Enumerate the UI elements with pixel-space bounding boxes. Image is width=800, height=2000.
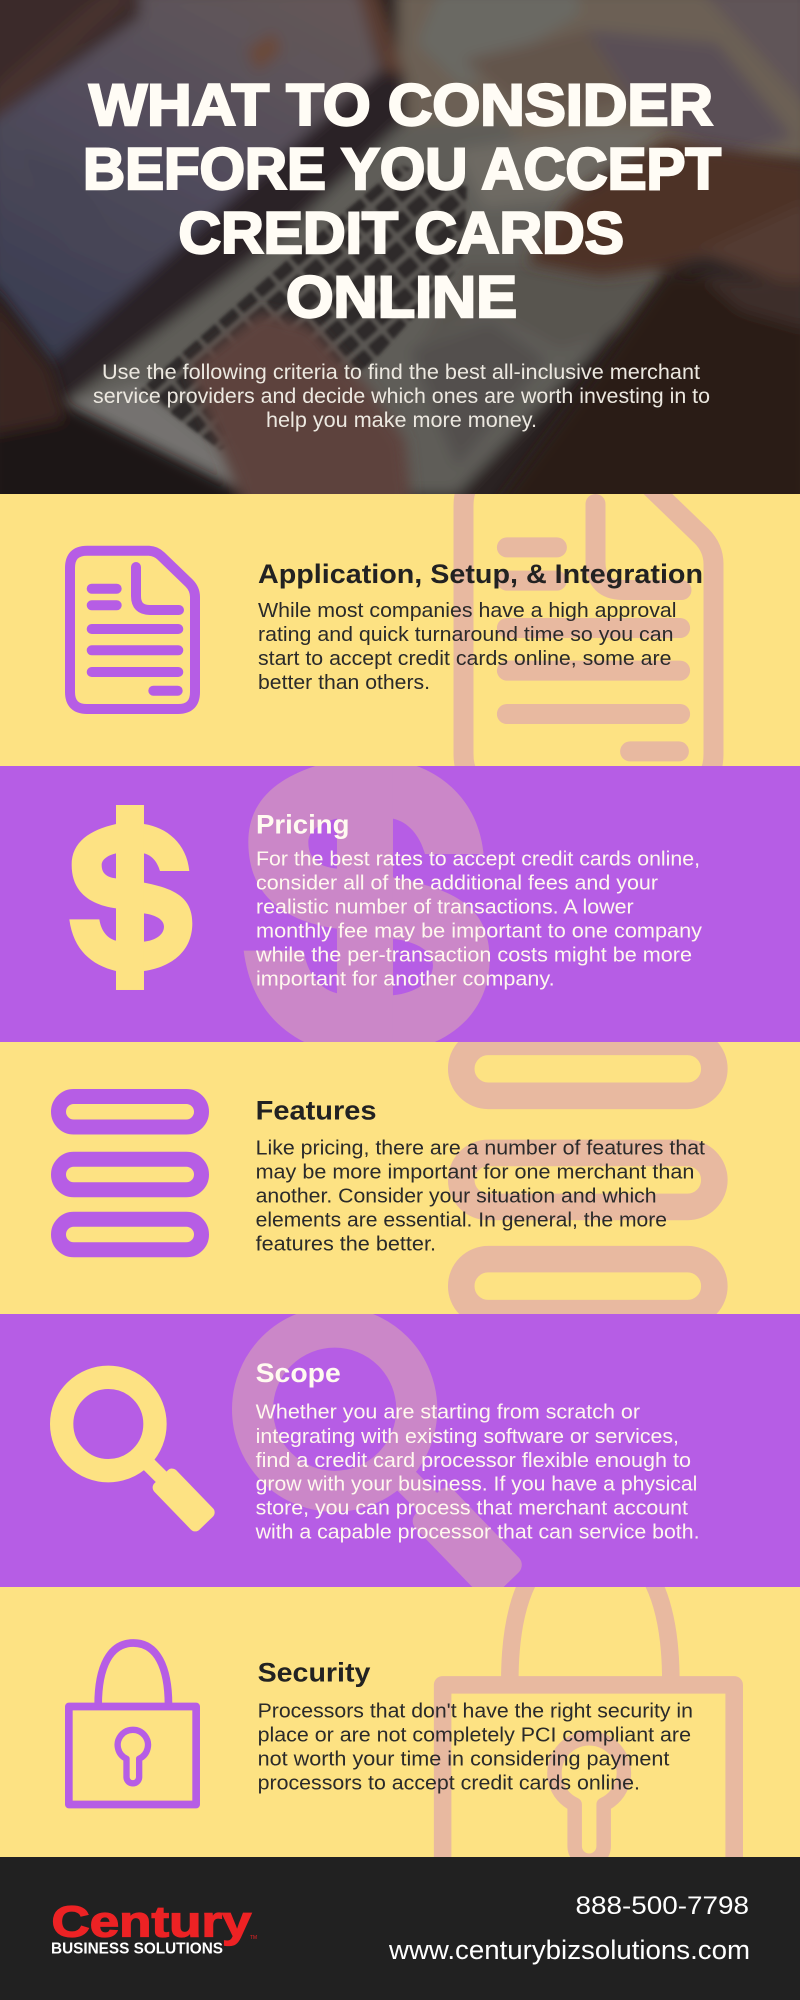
body text: processors to accept credit cards online.	[258, 1771, 640, 1794]
watermark: server bars	[461, 1042, 714, 1313]
panel: security	[65, 1587, 743, 1857]
heading: pricing: Pricing	[256, 810, 350, 840]
body text: rating and quick turnaround time so you can	[258, 623, 674, 646]
title: WHAT TO CONSIDER	[89, 73, 713, 138]
body text: with a capable processor that can service both.	[255, 1521, 700, 1544]
title: ONLINE	[286, 265, 517, 330]
photo: background, screen and laptop deck	[0, 0, 800, 520]
body text	[255, 1401, 700, 1544]
subtitle	[93, 361, 710, 432]
body text	[256, 1136, 705, 1255]
logo: Century Business Solutions: BUSINESS SOLUTIONS	[51, 1940, 223, 1957]
panel: application, setup and integration	[65, 494, 724, 766]
watermark: document icon	[464, 471, 714, 788]
body text: consider all of the additional fees and your	[256, 872, 658, 895]
subtitle: help you make more money.	[266, 409, 537, 432]
logo: Century Business Solutions: TM	[250, 1935, 257, 1941]
title: BEFORE YOU ACCEPT	[83, 137, 721, 202]
body text: better than others.	[258, 671, 430, 694]
logo: Century Business Solutions	[51, 1898, 257, 1957]
body text	[258, 1699, 693, 1794]
footer	[0, 1857, 800, 2000]
panel: scope	[0, 1314, 800, 1603]
panel: pricing	[0, 766, 800, 1042]
phone number: 888-500-7798	[576, 1892, 749, 1920]
heading: security: Security	[258, 1658, 370, 1688]
icon: server bars	[58, 1096, 202, 1250]
watermark: dollar sign	[244, 766, 490, 1042]
body text: integrating with existing software or services,	[256, 1425, 679, 1448]
icon: dollar sign	[69, 805, 192, 990]
subtitle: Use the following criteria to find the best all-inclusive merchant	[102, 361, 700, 384]
body text: may be more important for one merchant than	[256, 1160, 694, 1183]
body text: Like pricing, there are a number of features that	[256, 1136, 705, 1159]
body text: Processors that don't have the right security in	[258, 1699, 693, 1722]
body text: While most companies have a high approval	[258, 599, 676, 622]
icon: document	[70, 551, 195, 709]
icon: padlock	[69, 1643, 196, 1804]
watermark: padlock	[434, 1587, 743, 1857]
panel: features	[51, 1042, 728, 1314]
photo: hands and wooden table	[0, 140, 800, 510]
watermark: magnifying glass	[253, 1327, 526, 1603]
body text: store, you can process that merchant account	[256, 1497, 688, 1520]
title: CREDIT CARDS	[178, 201, 624, 266]
subtitle: service providers and decide which ones are worth investing in to	[93, 385, 710, 408]
website: www.centurybizsolutions.com	[388, 1935, 750, 1965]
heading: application, setup and integration: Application, Setup, & Integration	[258, 559, 703, 589]
heading: scope: Scope	[256, 1358, 341, 1388]
body text: start to accept credit cards online, some are	[258, 647, 672, 670]
body text: while the per-transaction costs might be more	[255, 943, 692, 966]
body text: another. Consider your situation and which	[256, 1184, 657, 1208]
body text: Whether you are starting from scratch or	[256, 1401, 640, 1424]
icon: magnifying glass	[62, 1377, 217, 1534]
body text: elements are essential. In general, the more	[256, 1208, 667, 1231]
body text	[255, 848, 703, 990]
body text	[258, 599, 676, 694]
body text: features the better.	[256, 1232, 436, 1255]
body text: realistic number of transactions. A lower	[256, 896, 634, 919]
body text: important for another company.	[256, 967, 555, 990]
body text: grow with your business. If you have a physical	[256, 1473, 697, 1496]
body text: place or are not completely PCI compliant are	[258, 1723, 691, 1746]
body text: find a credit card processor flexible enough to	[256, 1449, 691, 1472]
body text: not worth your time in considering payment	[258, 1747, 670, 1770]
logo: Century Business Solutions: Century	[52, 1898, 252, 1947]
heading: features: Features	[256, 1095, 377, 1125]
header panel with laptop photo	[0, 0, 800, 520]
body text: For the best rates to accept credit cards online,	[256, 848, 700, 871]
body text: monthly fee may be important to one company	[256, 920, 703, 942]
title	[83, 73, 721, 330]
photo: keyboard	[140, 165, 467, 450]
